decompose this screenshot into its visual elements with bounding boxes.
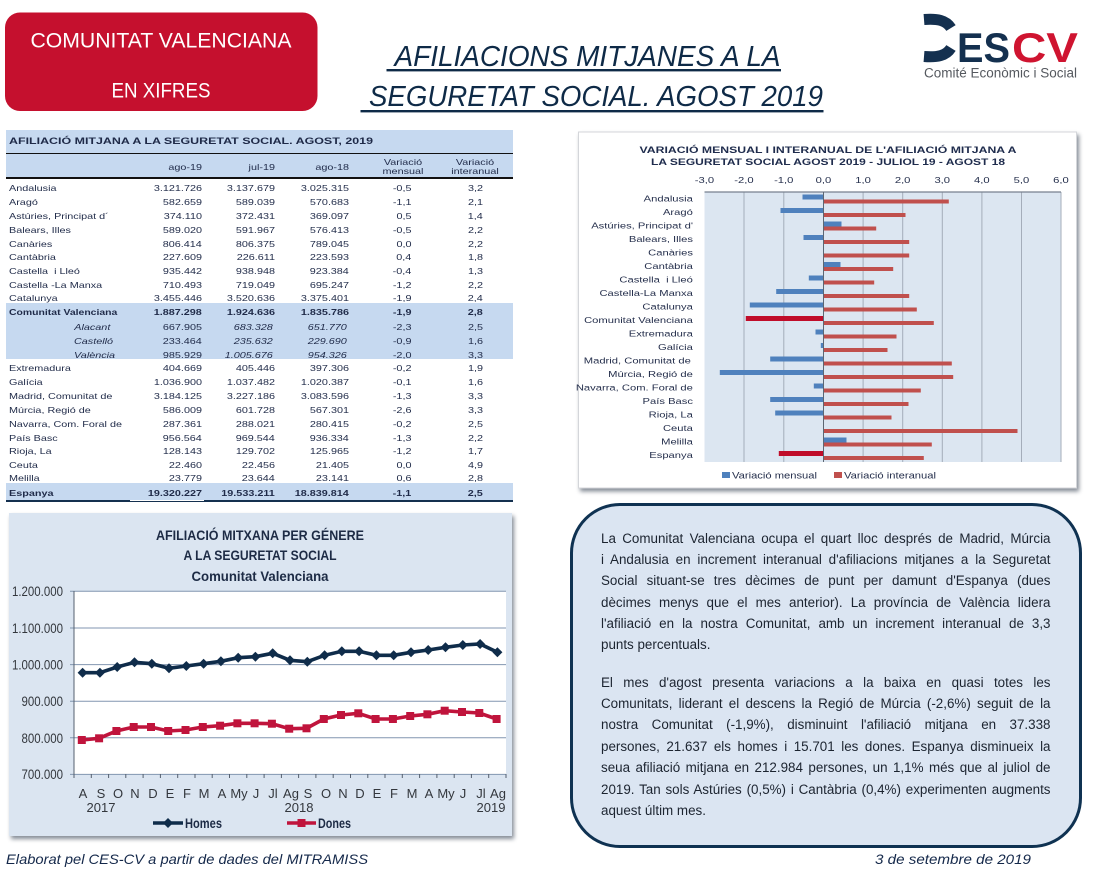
table rows: 0,0 [396, 461, 412, 471]
table rows: 3.083.596 [301, 392, 349, 402]
x axis labels: My [230, 786, 248, 801]
table rows: 589.039 [236, 198, 275, 208]
table rows: -2,6 [393, 406, 412, 416]
table rows: Galícia [9, 378, 43, 388]
table rows: -2,0 [393, 351, 412, 361]
table rows: 404.669 [163, 364, 202, 374]
legend: Dones [318, 815, 351, 831]
category labels: Astúries, Principat d' [591, 222, 693, 231]
table rows: -2,3 [393, 323, 412, 333]
table rows: 2,8 [468, 308, 484, 318]
chart title [156, 526, 364, 584]
table rows: 695.247 [310, 281, 349, 291]
text panel: commentary: Social situant-se tres dècimes de punt per damunt d'Espanya (dues [601, 573, 1050, 588]
chart title: A LA SEGURETAT SOCIAL [184, 547, 337, 563]
text panel: commentary: dècimes menys que el mes anterior). La província de València lidera [601, 595, 1050, 610]
table rows: 4,9 [468, 461, 483, 471]
table rows: 233.464 [163, 337, 203, 347]
x axis labels: Ag [490, 786, 506, 801]
table rows: 1,8 [468, 253, 483, 263]
table rows: 719.049 [236, 281, 275, 291]
table rows: -1,2 [393, 447, 412, 457]
table rows: 22.460 [169, 461, 202, 471]
table rows: Castella -La Manxa [9, 281, 103, 291]
x axis labels: M [407, 786, 417, 801]
x axis labels: F [183, 786, 191, 801]
table rows: 2,1 [468, 198, 483, 208]
main title [360, 41, 824, 113]
table rows: 1.036.900 [154, 378, 202, 388]
table header: ago-18 [315, 163, 349, 173]
table rows: Madrid, Comunitat de [9, 392, 112, 402]
text panel: commentary [570, 503, 1082, 848]
axis labels: 5,0 [1014, 176, 1030, 186]
table rows: 2,2 [468, 226, 483, 236]
panel: line chart afiliació per gènere [9, 513, 512, 836]
table rows: -1,1 [393, 489, 412, 499]
table rows: 1.924.636 [227, 308, 275, 318]
table rows: 1.835.786 [301, 308, 349, 318]
table rows: 0,6 [396, 474, 412, 484]
category labels: Catalunya [642, 303, 693, 312]
table rows: -0,9 [393, 337, 412, 347]
table rows: 601.728 [236, 406, 275, 416]
table rows: Andalusia [9, 184, 57, 194]
y axis labels: 700.000 [22, 767, 63, 782]
table header: ago-19 [168, 163, 202, 173]
table rows: 128.143 [163, 447, 202, 457]
legend: Variació interanual [844, 470, 936, 480]
table rows: 3.184.125 [154, 392, 202, 402]
table rows: Ceuta [9, 461, 39, 471]
axis labels: 1,0 [855, 176, 871, 186]
text panel: commentary: i Andalusia en increment interanual d'afiliacions mitjanes a la Seguretat [601, 552, 1050, 567]
table rows: Extremadura [9, 364, 72, 374]
table rows: 405.446 [236, 364, 275, 374]
table rows: -1,3 [393, 434, 412, 444]
logo: CES-CV: CV [1012, 24, 1078, 71]
table rows: 3,3 [468, 406, 483, 416]
table rows: 23.779 [169, 474, 202, 484]
table header: Variació [456, 158, 494, 168]
table rows: -1,9 [393, 294, 412, 304]
x axis labels: N [338, 786, 348, 801]
table rows: 570.683 [310, 198, 349, 208]
category labels: Melilla [661, 438, 693, 447]
table rows: 589.020 [163, 226, 202, 236]
chart title [640, 144, 1017, 168]
category labels: Rioja, La [649, 411, 693, 420]
legend: Variació mensual [732, 470, 817, 480]
table header: interanual [451, 167, 499, 177]
x axis labels: O [321, 786, 331, 801]
x axis labels: J [253, 786, 259, 801]
category labels: Andalusia [644, 195, 693, 204]
table rows: 1.020.387 [301, 378, 349, 388]
text panel: commentary: l'afiliació en la nostra Comunitat, amb un increment interanual de 3,3 [601, 616, 1050, 631]
table rows: 19.320.227 [148, 489, 202, 499]
table rows: -0,1 [393, 378, 412, 388]
category labels: Comunitat Valenciana [584, 316, 693, 326]
table rows: 1,4 [468, 212, 484, 222]
table title: AFILIACIÓ MITJANA A LA SEGURETAT SOCIAL. AGOST, 2019 [9, 135, 373, 146]
table rows: 586.009 [163, 406, 202, 416]
line: dones [82, 711, 497, 740]
table: afiliació mitjana [6, 130, 513, 502]
axis labels: 0,0 [816, 176, 832, 186]
x axis labels: S [304, 786, 313, 801]
table header: Variació [384, 158, 422, 168]
table header [168, 158, 499, 177]
table rows: 0,4 [396, 253, 412, 263]
text panel: commentary: nostra Comunitat (-1,9%), disminuint l'afiliació mitjana en 37.338 [601, 717, 1050, 732]
table rows: 19.533.211 [221, 489, 276, 499]
panel: bar chart variació mensual i interanual [576, 132, 1076, 488]
axis labels: -3,0 [695, 176, 715, 186]
table rows: 956.564 [163, 434, 203, 444]
table rows: 2,2 [468, 240, 483, 250]
category labels: Canàries [648, 249, 693, 258]
chart title: AFILIACIÓ MITXANA PER GÉNERE [156, 526, 364, 543]
table rows: 1.037.482 [227, 378, 275, 388]
axis labels: 4,0 [974, 176, 990, 186]
legend: Homes [185, 815, 222, 831]
table rows: 3.455.446 [154, 294, 202, 304]
x axis labels: N [130, 786, 140, 801]
table rows: -1,3 [393, 392, 412, 402]
text panel: commentary: El mes d'agost presenta variacions a la baixa en quasi totes les [601, 675, 1050, 690]
axis labels: 3,0 [934, 176, 951, 186]
x axis labels: 2017 [87, 800, 115, 815]
table rows: 2,2 [468, 281, 483, 291]
chart title: LA SEGURETAT SOCIAL AGOST 2019 - JULIOL 19 - AGOST 18 [651, 157, 1005, 168]
table rows: -0,5 [393, 226, 412, 236]
category labels: Aragó [663, 208, 693, 218]
table rows: 1.005.676 [225, 351, 274, 361]
table rows: -0,2 [393, 420, 412, 430]
category labels: Extremadura [629, 330, 693, 339]
y axis labels: 1.100.000 [12, 621, 63, 636]
x axis labels: 2019 [477, 800, 505, 815]
y axis labels: 1.200.000 [12, 584, 63, 599]
category labels: Espanya [649, 451, 693, 461]
category labels: Castella i Lleó [619, 276, 693, 285]
x axis labels: A [425, 786, 434, 801]
footer: source: Elaborat pel CES-CV a partir de dades del MITRAMISS [6, 851, 369, 867]
y axis labels: 900.000 [22, 694, 63, 709]
table rows: 227.609 [163, 253, 202, 263]
badge: Comunitat Valenciana en xifres [5, 12, 318, 111]
x axis labels: D [148, 786, 158, 801]
table rows: -1,1 [393, 198, 412, 208]
table rows: -1,9 [393, 308, 412, 318]
table rows: -0,4 [393, 267, 412, 277]
table rows: 372.431 [236, 212, 275, 222]
table rows: 226.611 [237, 253, 275, 263]
x axis labels: Ag [283, 786, 299, 801]
table rows: 3.121.726 [154, 184, 202, 194]
table rows: 3.137.679 [227, 184, 275, 194]
table rows: Astúries, Principat d´ [9, 212, 109, 222]
footer: date: 3 de setembre de 2019 [875, 851, 1031, 867]
table rows: 3,3 [468, 392, 483, 402]
table rows: 936.334 [310, 434, 350, 444]
table rows [9, 184, 484, 499]
table rows: 369.097 [310, 212, 349, 222]
x axis labels: My [437, 786, 455, 801]
axis labels: -1,0 [774, 176, 794, 186]
table rows: 129.702 [236, 447, 275, 457]
text panel: commentary: punts percentuals. [601, 637, 710, 652]
table rows: 223.593 [310, 253, 349, 263]
x axis labels: F [390, 786, 398, 801]
table rows: 0,0 [396, 240, 412, 250]
table rows: 667.905 [163, 323, 202, 333]
axis labels: 6,0 [1053, 176, 1069, 186]
table rows: Comunitat Valenciana [9, 308, 118, 317]
table rows: 582.659 [163, 198, 202, 208]
table rows: 651.770 [308, 323, 348, 333]
text panel: commentary: seua afiliació mitjana en 212.984 persones, un 1,1% més que al juliol de [601, 760, 1050, 775]
table rows: 3.227.186 [227, 392, 275, 402]
table rows: 3.520.636 [227, 294, 275, 304]
table rows: 229.690 [307, 337, 348, 347]
category labels: Balears, Illes [629, 235, 693, 245]
table rows: 397.306 [310, 364, 349, 374]
table rows: 3.025.315 [301, 184, 349, 194]
table rows: 2,2 [468, 434, 483, 444]
table rows: Alacant [73, 323, 111, 333]
table rows: Catalunya [9, 294, 58, 304]
table header: jul-19 [247, 163, 275, 173]
chart title: VARIACIÓ MENSUAL I INTERANUAL DE L'AFILIACIÓ MITJANA A [640, 144, 1017, 156]
table rows: 806.414 [163, 240, 203, 250]
bars: variació mensual [720, 194, 846, 456]
x axis labels: A [79, 786, 88, 801]
table rows: -0,5 [393, 184, 412, 194]
table rows: 374.110 [164, 212, 202, 222]
table rows: 0,5 [396, 212, 412, 222]
table rows: 710.493 [163, 281, 202, 291]
table header: mensual [383, 167, 423, 177]
category labels: Múrcia, Regió de [608, 370, 693, 380]
table rows: Castella i Lleó [9, 267, 80, 277]
text panel: commentary: 2019. Tan sols Astúries (0,5%) i Cantàbria (0,4%) experimenten augments [601, 782, 1050, 797]
x axis labels: M [199, 786, 209, 801]
table rows: 789.045 [310, 240, 349, 250]
table rows: 3,3 [468, 351, 483, 361]
table rows: País Basc [9, 434, 58, 444]
x axis labels [79, 786, 506, 815]
table rows: Castelló [74, 337, 114, 347]
axis labels: 2,0 [895, 176, 911, 186]
table rows: Espanya [9, 489, 54, 499]
x axis labels: A [218, 786, 227, 801]
table rows: 985.929 [163, 351, 202, 361]
table rows: 287.361 [163, 420, 202, 430]
table rows: Aragó [9, 198, 38, 208]
y axis labels: 1.000.000 [12, 658, 63, 672]
table rows: 18.839.814 [295, 489, 350, 499]
table rows: 591.967 [236, 226, 275, 236]
legend [722, 470, 936, 480]
legend [153, 815, 351, 831]
text panel: commentary: Comunitats, liderant el descens la Regió de Múrcia (-2,6%) seguit de la [601, 696, 1050, 711]
badge: Comunitat Valenciana en xifres: COMUNITAT VALENCIANA [30, 30, 292, 52]
table rows: 1,9 [468, 364, 483, 374]
x axis labels: E [373, 786, 382, 801]
table rows: 288.021 [236, 420, 275, 430]
category labels: Galícia [658, 343, 693, 353]
x axis labels: O [113, 786, 123, 801]
table rows: 576.413 [310, 226, 349, 236]
bars: variació interanual [824, 200, 1018, 460]
table rows: Navarra, Com. Foral de [9, 420, 122, 430]
category labels: Madrid, Comunitat de [584, 357, 691, 366]
table rows: 2,8 [468, 474, 483, 484]
table rows: 2,5 [468, 489, 484, 499]
category labels: Navarra, Com. Foral de [576, 384, 693, 393]
table rows: 683.328 [234, 323, 274, 333]
table rows: 1,3 [468, 267, 483, 277]
text panel: commentary: aquest últim mes. [601, 803, 706, 818]
x axis labels: E [166, 786, 175, 801]
table rows: -1,2 [393, 281, 412, 291]
table rows: Múrcia, Regió de [9, 406, 91, 416]
table rows: 23.141 [316, 474, 349, 484]
table rows: 3.375.401 [301, 294, 349, 304]
table rows: 2,5 [468, 323, 483, 333]
x axis labels: Jl [476, 786, 486, 801]
category labels: Cantàbria [644, 262, 693, 272]
table rows: 2,5 [468, 420, 483, 430]
text panel: commentary: persones, 21.637 els homes i 15.701 les dones. Espanya disminueix la [601, 739, 1050, 754]
x axis labels: J [460, 786, 466, 801]
main title: SEGURETAT SOCIAL. AGOST 2019 [369, 81, 823, 113]
table rows: 1,7 [468, 447, 483, 457]
table rows: 938.948 [236, 267, 275, 277]
table rows: 21.405 [316, 461, 349, 471]
table rows: 923.384 [310, 267, 350, 277]
table rows: 3,2 [468, 184, 483, 194]
category labels: Ceuta [663, 424, 693, 434]
table rows: 935.442 [163, 267, 202, 277]
table rows: 1,6 [468, 337, 483, 347]
y axis labels [12, 584, 63, 782]
x axis labels: Jl [268, 786, 278, 801]
text panel: commentary: La Comunitat Valenciana ocupa el quart lloc després de Madrid, Múrcia [601, 531, 1050, 546]
table rows: 125.965 [310, 447, 349, 457]
table rows: 806.375 [236, 240, 275, 250]
category labels: País Basc [643, 397, 693, 407]
table rows: 567.301 [310, 406, 349, 416]
table rows: 1,6 [468, 378, 483, 388]
logo: CES-CV [924, 19, 1078, 80]
axis labels [695, 176, 1069, 186]
table rows: 969.544 [236, 434, 276, 444]
table rows: 235.632 [233, 337, 274, 347]
category labels: Castella-La Manxa [599, 289, 693, 299]
table rows: Melilla [9, 474, 40, 484]
x axis labels: 2018 [285, 800, 313, 815]
table rows: Balears, Illes [9, 226, 71, 236]
badge: Comunitat Valenciana en xifres: EN XIFRES [112, 80, 210, 102]
line: homes [83, 644, 497, 673]
table rows: Rioja, La [9, 447, 52, 457]
axis labels: -2,0 [734, 176, 754, 186]
table rows: 280.415 [310, 420, 349, 430]
table rows: València [74, 351, 115, 361]
table rows: 2,4 [468, 294, 484, 304]
main title: AFILIACIONS MITJANES A LA [393, 41, 780, 73]
category labels [576, 195, 693, 461]
table rows: 23.644 [242, 474, 276, 484]
logo: CES-CV: ES [957, 24, 1010, 71]
table rows: Canàries [9, 240, 53, 250]
y axis labels: 800.000 [22, 731, 63, 746]
x axis labels: S [97, 786, 106, 801]
table rows: Cantàbria [9, 253, 57, 263]
logo: CES-CV: Comité Econòmic i Social [924, 66, 1077, 80]
table rows: 22.456 [242, 461, 275, 471]
x axis labels: D [355, 786, 365, 801]
chart title: Comunitat Valenciana [192, 568, 329, 584]
table rows: 954.326 [308, 351, 348, 361]
table rows: -0,2 [393, 364, 412, 374]
table rows: 1.887.298 [154, 308, 203, 318]
